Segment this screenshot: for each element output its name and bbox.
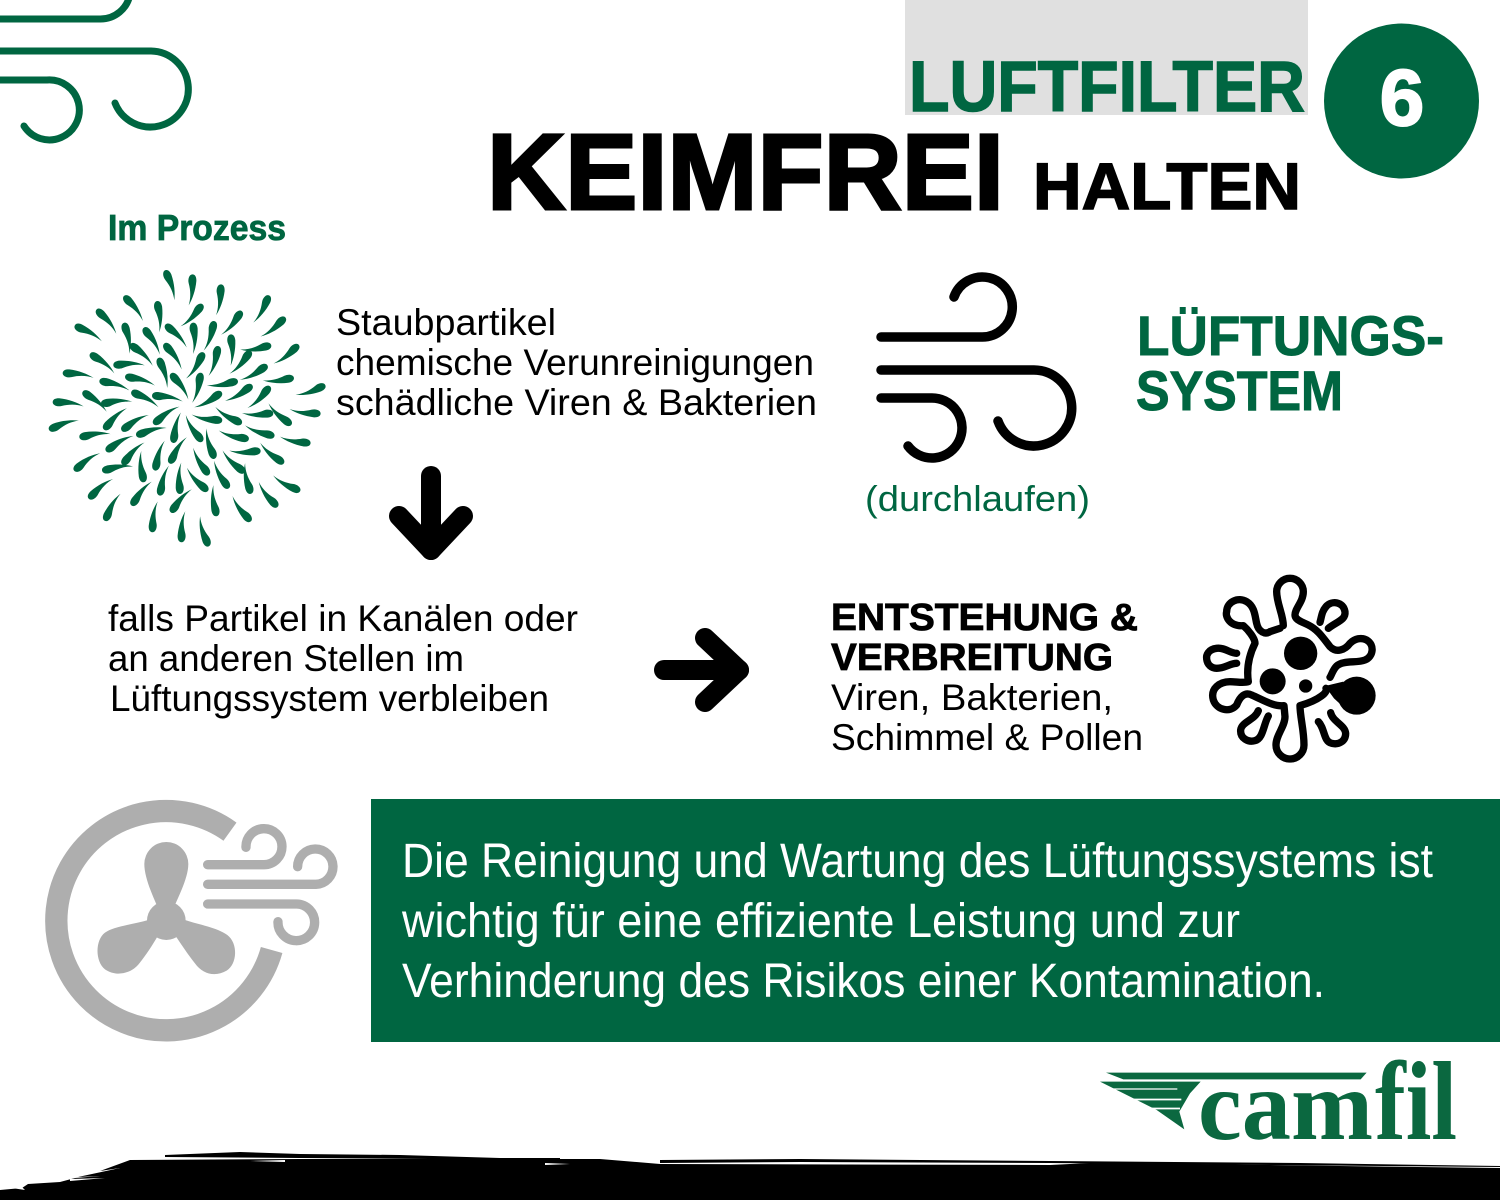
text block: particle types: chemische Verunreinigungen [336, 342, 814, 383]
panel: green callout: wichtig für eine effiziente Leistung und zur [401, 895, 1240, 948]
logo: camfil [1100, 1040, 1457, 1164]
text block: particles remain: an anderen Stellen im [108, 638, 464, 679]
decorative black brush stroke footer [0, 1152, 1500, 1200]
text block: particles remain: falls Partikel in Kanälen oder [108, 598, 578, 639]
text block: Entstehung und Verbreitung: VERBREITUNG [831, 637, 1113, 679]
title: Keimfrei halten [487, 111, 1301, 232]
icon: decorative wind top left [0, 0, 188, 140]
title: Keimfrei halten: KEIMFREI [487, 111, 1004, 232]
text block: particle types: schädliche Viren & Bakterien [336, 382, 817, 423]
heading: Im Prozess: Im Prozess [108, 207, 286, 248]
heading: Lüftungssystem: SYSTEM [1136, 359, 1343, 422]
logo: camfil: cam [1198, 1050, 1373, 1161]
badge: number 6: 6 [1380, 53, 1424, 142]
badge: number 6 [1324, 24, 1479, 178]
text block: particle types [336, 302, 817, 423]
panel: green callout [371, 799, 1500, 1042]
panel: green callout: Verhinderung des Risikos einer Kontamination. [402, 955, 1325, 1008]
text block: particles remain [108, 598, 578, 719]
text block: Entstehung und Verbreitung: Schimmel & Pollen [831, 717, 1143, 758]
arrow: down [399, 476, 463, 550]
panel: green callout: Die Reinigung und Wartung des Lüftungssystems ist [402, 835, 1433, 888]
icon: virus [1207, 578, 1376, 759]
icon: grey fan with wind [56, 811, 333, 1030]
arrow: right [664, 638, 739, 702]
title: Luftfilter on grey block: LUFTFILTER [909, 48, 1305, 127]
text block: Entstehung und Verbreitung [831, 597, 1143, 758]
logo: camfil: fil [1375, 1040, 1457, 1164]
heading: Lüftungssystem: LÜFTUNGS- [1137, 304, 1444, 367]
heading: Lüftungssystem [1136, 304, 1444, 422]
text block: particles remain: Lüftungssystem verbleiben [110, 678, 549, 719]
caption: durchlaufen: (durchlaufen) [865, 478, 1090, 519]
icon: black wind [881, 277, 1072, 458]
icon: green particle burst [48, 269, 327, 548]
text block: Entstehung und Verbreitung: Viren, Bakterien, [831, 677, 1113, 718]
text block: Entstehung und Verbreitung: ENTSTEHUNG & [831, 597, 1138, 639]
text block: particle types: Staubpartikel [336, 302, 556, 343]
title: Luftfilter on grey block [905, 0, 1308, 127]
title: Keimfrei halten: HALTEN [1033, 149, 1301, 223]
